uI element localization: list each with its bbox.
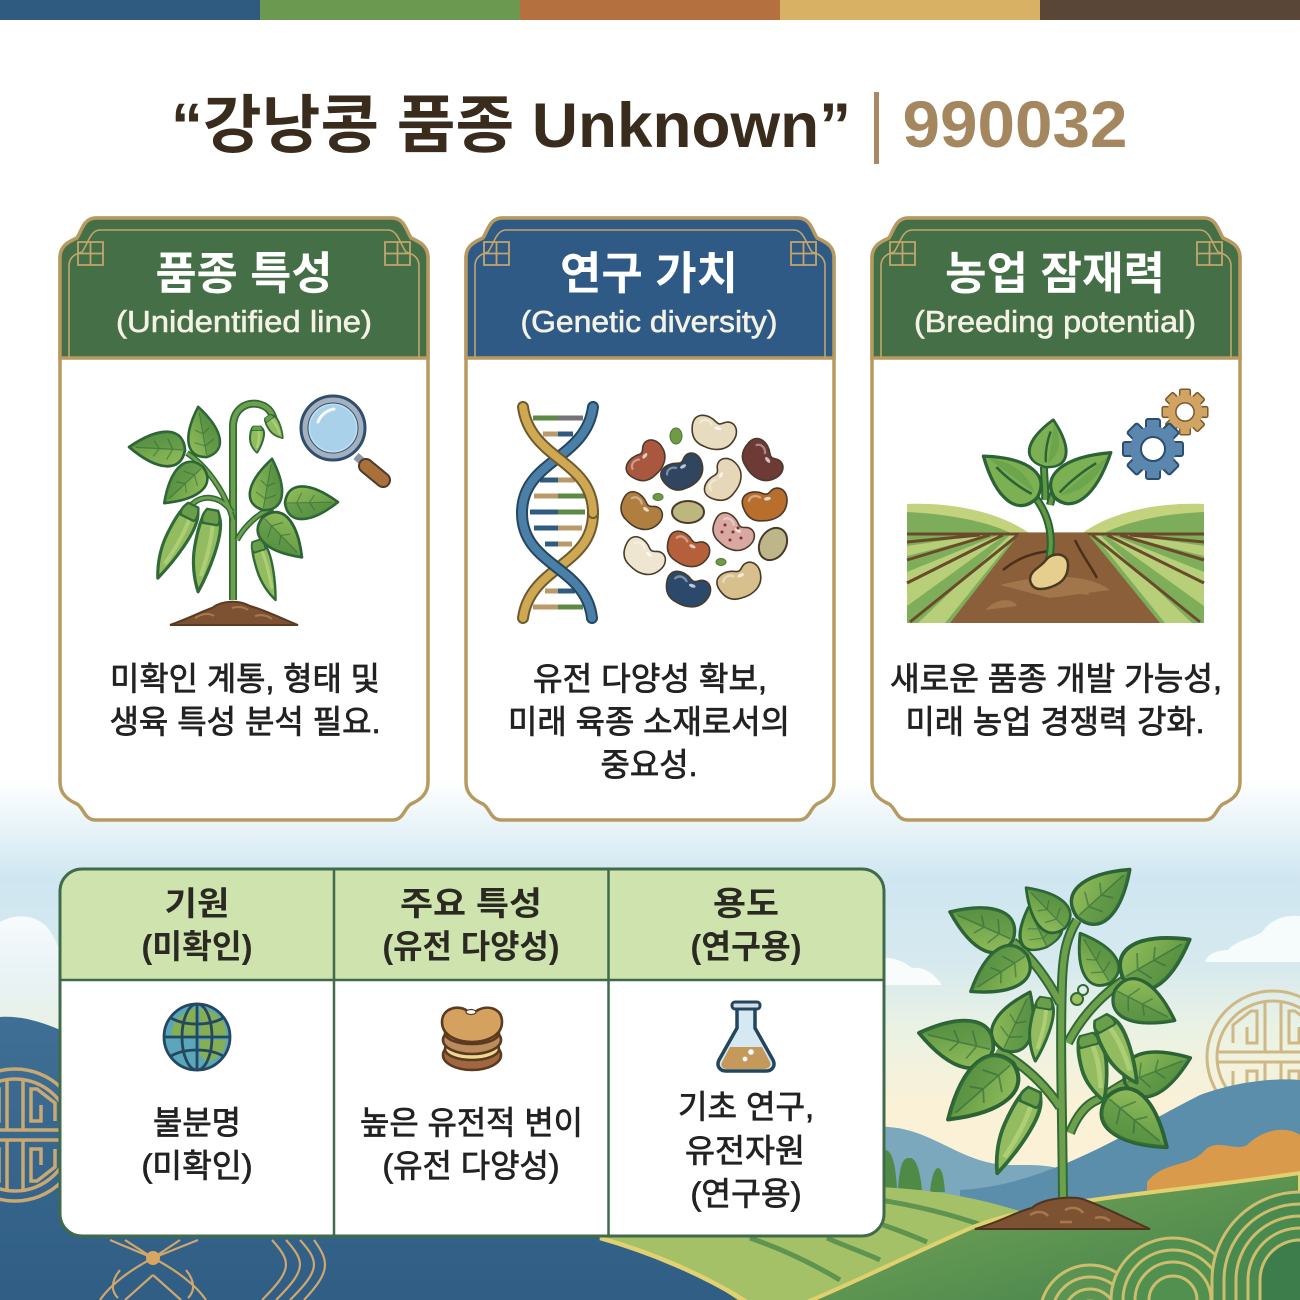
emblem: right (1207, 991, 1300, 1123)
column: use (678, 885, 814, 1212)
panel subheading: (Unidentified line) (116, 304, 372, 339)
icon: magnifier (304, 399, 383, 480)
column: origin: (미확인) (142, 1148, 252, 1184)
column: main trait: 주요 특성 (400, 885, 542, 922)
panel text: 미래 농업 경쟁력 강화. (906, 704, 1204, 740)
column: use: 유전자원 (685, 1133, 805, 1169)
panel subheading: (Genetic diversity) (520, 304, 778, 339)
title: “강낭콩 품종 Unknown” (171, 91, 851, 161)
column: origin: 기원 (164, 885, 230, 922)
panel text: 중요성. (600, 747, 698, 783)
hill: left blue (0, 1017, 750, 1300)
ornament: bottom waves (262, 1240, 325, 1300)
panel: agricultural potential (872, 218, 1240, 820)
column: origin: (미확인) (142, 928, 252, 965)
cloud: near table (880, 957, 942, 985)
ornament: bottom right arches (1040, 1192, 1300, 1300)
cloud: left soft (0, 916, 60, 1030)
panel text: 생육 특성 분석 필요. (110, 704, 380, 740)
panel: research value (466, 218, 834, 820)
illustration: large bean plant (914, 853, 1202, 1229)
hill: orange (1147, 1130, 1300, 1210)
background: sky and landscape (0, 780, 1300, 1300)
hill: far blue (880, 1127, 1100, 1240)
illustration: seedling in field (907, 417, 1204, 623)
icon: gears (1123, 389, 1208, 479)
icon: stacked beans (442, 1008, 502, 1070)
panel text (508, 661, 790, 783)
panel text (890, 661, 1222, 740)
panel subheading: (Breeding potential) (914, 304, 1196, 339)
cloud: right (1205, 916, 1300, 962)
hill: front green (807, 1173, 1300, 1300)
icon: bean plant (128, 404, 338, 625)
column: use: (연구용) (690, 1176, 802, 1212)
panel heading: 농업 잠재력 (945, 248, 1165, 299)
panel text: 미래 육종 소재로서의 (508, 704, 790, 740)
column: main trait: (유전 다양성) (382, 1148, 560, 1184)
panel text: 미확인 계통, 형태 및 (110, 661, 380, 697)
hill: pale green (500, 1187, 1040, 1300)
summary table (60, 869, 884, 1236)
panel text: 새로운 품종 개발 가능성, (890, 661, 1222, 697)
column: use: 용도 (713, 885, 779, 922)
column: use: (연구용) (690, 928, 802, 965)
column: main trait: (유전 다양성) (382, 928, 560, 965)
panel heading: 연구 가치 (560, 248, 738, 299)
title code: 990032 (902, 87, 1128, 161)
top colour bar (0, 0, 1300, 20)
title (171, 87, 1128, 164)
icon: flask (718, 1002, 774, 1071)
panel: variety traits (60, 218, 428, 820)
column: use: 기초 연구, (678, 1089, 814, 1125)
emblem: left (0, 1069, 81, 1201)
column: origin: 불분명 (153, 1105, 241, 1141)
hill: blue right (960, 1079, 1300, 1300)
icon: DNA helix (522, 407, 593, 618)
column: origin (142, 885, 252, 1184)
icon: assorted beans (614, 413, 793, 613)
panel text: 유전 다양성 확보, (533, 661, 767, 697)
icon: globe (164, 1004, 230, 1070)
panel heading: 품종 특성 (156, 248, 332, 299)
trees (885, 1150, 945, 1192)
ornament: bottom flower (100, 1240, 206, 1300)
column: main trait: 높은 유전적 변이 (360, 1105, 583, 1141)
column: main trait (360, 885, 583, 1184)
panel text (110, 661, 380, 740)
